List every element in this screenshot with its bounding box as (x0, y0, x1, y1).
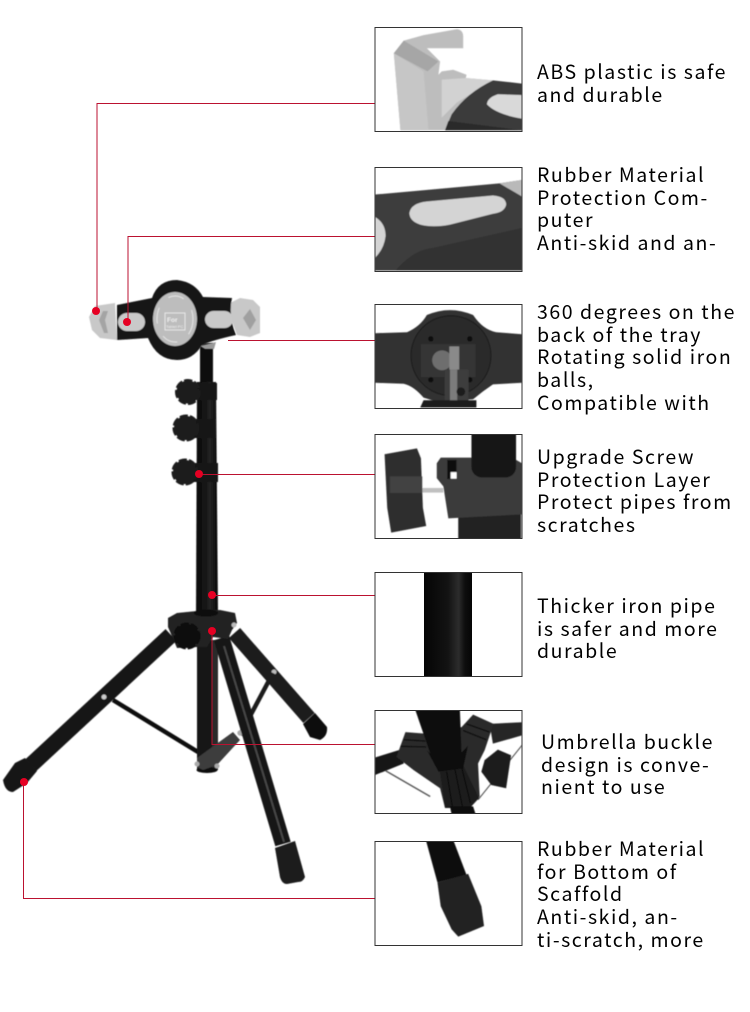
text: thicker pipe: is safer and more (537, 613, 719, 642)
text: ABS plastic: ABS plastic is safe (537, 56, 727, 85)
text: 360 degrees (537, 296, 736, 416)
height adjustment knobs (173, 380, 218, 484)
text: rubber protection: Protection Com- (537, 182, 709, 211)
text: 360 degrees: Rotating solid iron (537, 341, 732, 370)
round center plate (153, 292, 197, 346)
left leg (3, 635, 171, 792)
front leg (222, 638, 305, 884)
text: thicker pipe (537, 590, 719, 664)
text: upgrade screw (537, 441, 733, 538)
left gray clamp (89, 303, 117, 340)
text: 360 degrees: Compatible with (537, 387, 711, 416)
text: 360 degrees: balls, (537, 364, 595, 393)
text: rubber foot: for Bottom of (537, 856, 678, 885)
text: rubber foot: Rubber Material (537, 833, 705, 862)
text: rubber protection: puter (537, 204, 594, 233)
thumbnail: rubber pad (375, 167, 522, 271)
thumbnail: ABS clamp (375, 27, 522, 131)
text: rubber foot: Anti-skid, an- (537, 901, 679, 930)
text: ABS plastic: and durable (537, 79, 664, 108)
text: umbrella buckle: nient to use (541, 771, 666, 800)
hub (168, 610, 237, 648)
icon: tripod stand (3, 343, 327, 884)
shadow under holder (200, 342, 216, 349)
text: thicker pipe: Thicker iron pipe (537, 590, 716, 619)
text: upgrade screw: scratches (537, 509, 637, 538)
thumbnail: upgrade screw (375, 422, 522, 539)
right pad (205, 311, 233, 328)
callout dots (20, 307, 216, 786)
text: thicker pipe: durable (537, 635, 618, 664)
rear right leg (234, 633, 327, 740)
bottom bracket (194, 730, 243, 770)
left pad (118, 313, 145, 331)
thumbnail: umbrella buckle (375, 710, 522, 815)
leg braces (113, 673, 273, 752)
thumbnail frames (375, 28, 522, 946)
text: umbrella buckle: design is conve- (541, 749, 710, 778)
text: rubber protection: Anti-skid and an- (537, 227, 717, 256)
center pole (196, 343, 218, 773)
callout lines (24, 104, 375, 898)
thumbnail: rubber foot (375, 840, 522, 945)
icon: tablet holder (89, 280, 260, 360)
text: rubber protection: Rubber Material (537, 159, 705, 188)
round center plate: Tablet PC (166, 324, 183, 329)
text: upgrade screw: Protect pipes from (537, 486, 733, 515)
right gray clamp (230, 298, 260, 337)
text: upgrade screw: Protection Layer (537, 464, 711, 493)
text: umbrella buckle (541, 726, 714, 800)
text: rubber foot: Scaffold (537, 878, 624, 907)
text: 360 degrees: back of the tray (537, 319, 702, 348)
round center plate: For (167, 317, 178, 324)
text: upgrade screw: Upgrade Screw (537, 441, 695, 470)
text: 360 degrees: 360 degrees on the (537, 296, 736, 325)
text: umbrella buckle: Umbrella buckle (541, 726, 714, 755)
text: rubber foot: ti-scratch, more (537, 924, 705, 953)
text: rubber protection (537, 159, 717, 256)
thumbnail: rotating ball joint (375, 304, 522, 408)
thumbnail: thicker iron pipe (375, 570, 522, 678)
black body (117, 280, 236, 360)
text: rubber foot (537, 833, 705, 953)
text: ABS plastic (537, 56, 727, 108)
